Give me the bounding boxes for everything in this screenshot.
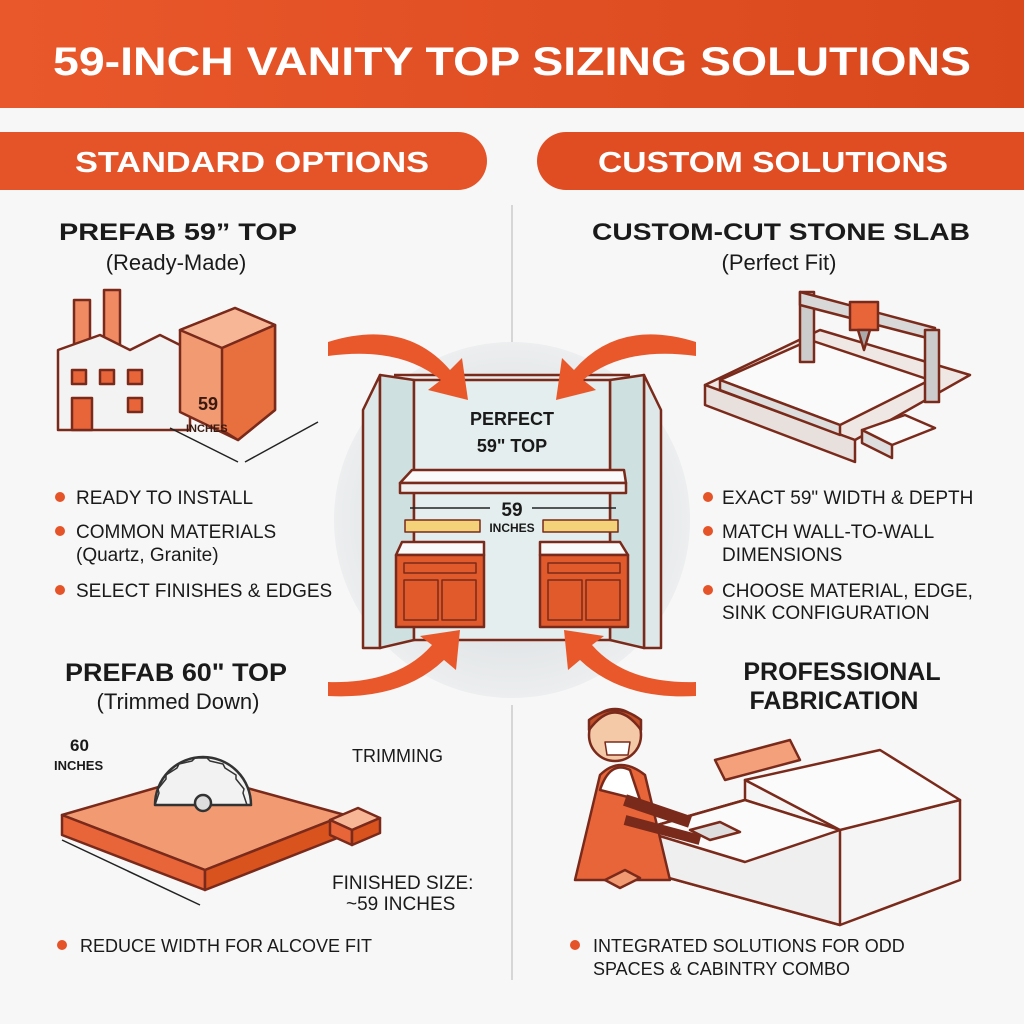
heading: prefab 60: (Trimmed Down): [97, 689, 259, 714]
center panel: perfect 59 top: INCHES: [489, 521, 535, 535]
arrow: bottom-right: [564, 630, 696, 696]
arrow: top-right: [556, 334, 696, 400]
bullets: standard prefab 59: READY TO INSTALL: [76, 488, 253, 509]
arrow: bottom-left: [328, 630, 460, 696]
icon: worker fabricating countertop: [575, 709, 960, 925]
bullets: custom-cut: [703, 488, 973, 624]
bullets: custom-cut: DIMENSIONS: [722, 545, 842, 566]
bullets: standard prefab 59: [55, 488, 332, 602]
heading: custom-cut: CUSTOM-CUT STONE SLAB: [592, 219, 970, 246]
center panel: perfect 59 top: 59: [501, 500, 523, 521]
pill: standard options: STANDARD OPTIONS: [75, 147, 429, 179]
center panel: perfect 59 top: [334, 342, 690, 698]
icon: slab with saw: [54, 736, 380, 905]
heading: prefab 59: (Ready-Made): [106, 250, 246, 275]
title: 59-INCH VANITY TOP SIZING SOLUTIONS: [53, 40, 971, 84]
bullets: standard prefab 59: (Quartz, Granite): [76, 545, 219, 566]
heading: professional fabrication: FABRICATION: [750, 687, 918, 715]
pill: standard options: [0, 132, 487, 190]
heading: prefab 60: [65, 659, 287, 714]
bullet: integrated solutions: [570, 936, 905, 979]
heading: professional fabrication: PROFESSIONAL: [743, 658, 941, 686]
heading: prefab 59: [59, 219, 297, 275]
heading: custom-cut: (Perfect Fit): [722, 250, 836, 275]
icon: slab with saw: INCHES: [54, 758, 103, 773]
label: trimming: TRIMMING: [352, 746, 443, 766]
icon: factory and box: [58, 290, 318, 462]
label: finished size: ~59 INCHES: [346, 894, 455, 915]
label: finished size: [332, 873, 473, 915]
icon: slab with saw: 60: [70, 736, 89, 755]
bullets: custom-cut: CHOOSE MATERIAL, EDGE,: [722, 581, 973, 602]
icon: factory and box: 59: [198, 394, 218, 414]
bullets: custom-cut: SINK CONFIGURATION: [722, 603, 930, 624]
heading: professional fabrication: [743, 658, 941, 715]
heading: custom-cut: [592, 219, 970, 275]
pill: custom solutions: [537, 132, 1024, 190]
center panel: perfect 59 top: PERFECT: [470, 409, 554, 429]
bullets: standard prefab 59: COMMON MATERIALS: [76, 522, 276, 543]
bullets: custom-cut: MATCH WALL-TO-WALL: [722, 522, 934, 543]
heading: prefab 59: PREFAB 59” TOP: [59, 219, 297, 246]
center panel: perfect 59 top: 59" TOP: [477, 436, 547, 456]
bullets: custom-cut: EXACT 59" WIDTH & DEPTH: [722, 488, 973, 509]
bullet: integrated solutions: INTEGRATED SOLUTIONS FOR ODD: [593, 936, 905, 956]
heading: prefab 60: PREFAB 60" TOP: [65, 659, 287, 687]
bullet: integrated solutions: SPACES & CABINTRY COMBO: [593, 959, 850, 979]
header banner: [0, 0, 1024, 108]
bullet: reduce width: REDUCE WIDTH FOR ALCOVE FIT: [80, 936, 372, 956]
bullets: standard prefab 59: SELECT FINISHES & EDGES: [76, 581, 332, 602]
arrow: top-left: [328, 334, 468, 400]
icon: factory and box: INCHES: [186, 423, 228, 435]
label: finished size: FINISHED SIZE:: [332, 873, 473, 894]
icon: CNC slab cutter: [705, 292, 970, 462]
pill: custom solutions: CUSTOM SOLUTIONS: [598, 147, 948, 179]
